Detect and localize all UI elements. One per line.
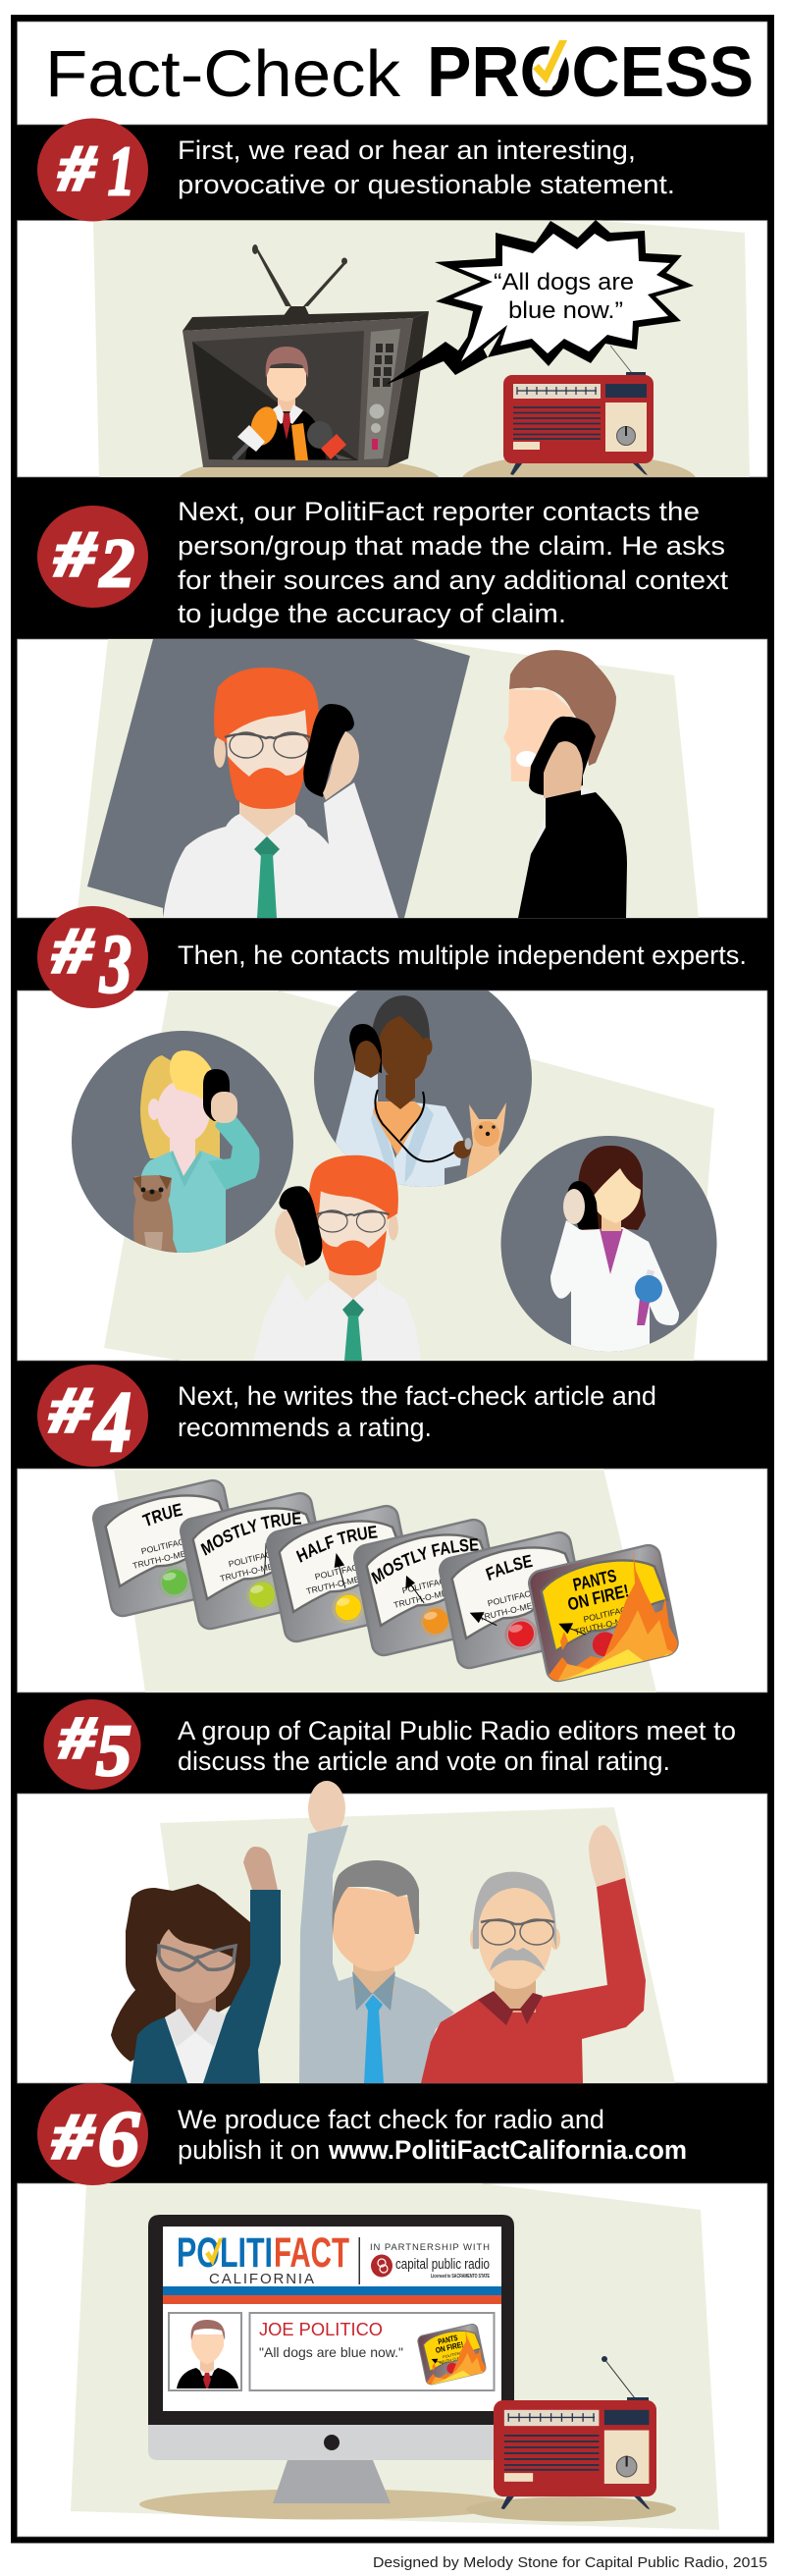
- reporter calling experts: [253, 1155, 421, 1361]
- meter: pants on fire: PANTS: [571, 1565, 618, 1595]
- step 2 badge: [37, 506, 148, 608]
- meter: true: POLITIFACT: [140, 1535, 191, 1556]
- icon: radio with antenna: [494, 2356, 656, 2509]
- profile card: [169, 2313, 241, 2390]
- step 1 badge: #: [58, 133, 97, 204]
- meter: false: POLITIFACT: [487, 1587, 538, 1608]
- expert: doctor with dog: [314, 991, 532, 1193]
- partnership logo: [370, 2242, 490, 2280]
- speech bubble: [386, 220, 694, 385]
- step 4 text: [178, 1381, 656, 1442]
- meter: false: FALSE: [485, 1555, 533, 1581]
- step 4 text: Next, he writes the fact-check article and: [178, 1381, 656, 1411]
- meter: true: TRUTH-O-METER: [131, 1544, 203, 1571]
- step 5 badge: 5: [96, 1711, 131, 1792]
- step 4 badge: 4: [92, 1375, 131, 1471]
- meter: pants on fire: POLITIFACT: [583, 1603, 633, 1625]
- step 6 badge: [37, 2083, 148, 2185]
- icon: desktop monitor with website: [148, 2215, 514, 2503]
- panel 4: truth-o-meter ratings: [17, 1469, 767, 1692]
- meter: mostly false: [353, 1518, 491, 1657]
- meter: mostly false: TRUTH-O-METER: [392, 1583, 464, 1610]
- claim card: JOE POLITICO: [259, 2319, 383, 2339]
- step 2 badge: 2: [99, 526, 134, 602]
- step 4 badge: [37, 1365, 148, 1471]
- step 4 text: recommends a rating.: [178, 1413, 432, 1442]
- step 2 badge: #: [54, 518, 97, 590]
- mini pants on fire meter: [417, 2323, 489, 2387]
- politifact logo: [177, 2229, 349, 2287]
- claim card: "All dogs are blue now.": [259, 2344, 403, 2360]
- panel 6: published online and on radio: [18, 2183, 767, 2537]
- bubble quote: [494, 269, 634, 324]
- step 2 text: [178, 497, 729, 628]
- reporter with phone: [163, 668, 398, 918]
- step 2 text: person/group that made the claim. He asks: [178, 531, 725, 561]
- politifact logo: POLITI: [177, 2229, 273, 2277]
- panel 2: reporter contacts source: [18, 639, 767, 918]
- meter: pants on fire: ON FIRE!: [566, 1581, 631, 1614]
- step 1 badge: 1: [108, 134, 134, 210]
- meter: true: [92, 1478, 230, 1618]
- partnership logo: capital public radio: [395, 2256, 490, 2273]
- step 5 text: A group of Capital Public Radio editors meet to: [178, 1716, 736, 1745]
- source on phone: [503, 650, 627, 918]
- meter: true: TRUE: [141, 1503, 183, 1526]
- pug: [132, 1175, 178, 1253]
- step 6 text: We produce fact check for radio and: [178, 2105, 604, 2134]
- meter: pants on fire: [527, 1543, 684, 1685]
- step 1 text: First, we read or hear an interesting,: [178, 135, 636, 165]
- expert: vet with pug: [72, 1031, 293, 1266]
- step 4 badge: #: [49, 1374, 92, 1446]
- meter: half true: POLITIFACT: [314, 1561, 365, 1582]
- partnership logo: Licensed to SACRAMENTO STATE: [431, 2274, 490, 2280]
- meter: mostly true: POLITIFACT: [228, 1548, 279, 1569]
- meter: mostly false: MOSTLY FALSE: [371, 1538, 479, 1584]
- step 2 text: Next, our PolitiFact reporter contacts the: [178, 497, 700, 526]
- politifact logo: FACT: [274, 2229, 349, 2277]
- bubble quote: blue now.”: [508, 297, 623, 324]
- step 5 text: [178, 1716, 736, 1776]
- title: PROCESS with check mark: PROCESS: [427, 33, 754, 112]
- panel 1: statement on tv and radio: [17, 220, 767, 477]
- title: Fact-Check: Fact-Check: [45, 37, 401, 111]
- claim card: [249, 2313, 495, 2390]
- meter: false: TRUTH-O-METER: [478, 1596, 550, 1623]
- meter: mostly true: TRUTH-O-METER: [219, 1557, 290, 1583]
- meter: false: [439, 1531, 576, 1669]
- editor: woman with cat-eye glasses: [111, 1847, 281, 2083]
- step 5 badge: #: [59, 1705, 97, 1770]
- step 2 text: to judge the accuracy of claim.: [178, 599, 566, 628]
- editor: man in red sweater: [421, 1825, 646, 2083]
- step 2 text: for their sources and any additional context: [178, 565, 729, 595]
- step 3 badge: #: [52, 915, 94, 987]
- step 6 text: publish it on: [178, 2135, 320, 2165]
- meter: pants on fire: TRUTH-O-METER: [574, 1611, 646, 1637]
- anchor figure: [234, 347, 353, 460]
- step 6 text: www.PolitiFactCalifornia.com: [328, 2135, 687, 2165]
- meter: mostly true: MOSTLY TRUE: [200, 1512, 302, 1556]
- step 1 text: [178, 135, 675, 199]
- meter: mostly true: [180, 1492, 316, 1630]
- meter: half true: [266, 1504, 403, 1643]
- icon: television with anchor: [183, 244, 429, 467]
- step 5 text: discuss the article and vote on final rating.: [178, 1746, 670, 1776]
- step 1 text: provocative or questionable statement.: [178, 170, 675, 199]
- title panel: [18, 22, 767, 125]
- panel 5: editors vote: [18, 1781, 767, 2083]
- step 3 badge: 3: [99, 918, 131, 1010]
- icon: radio: [503, 346, 654, 475]
- step 6 badge: 6: [98, 2094, 140, 2182]
- rug under radio: [466, 2497, 676, 2521]
- bubble quote: “All dogs are: [494, 269, 634, 295]
- meter: half true: HALF TRUE: [296, 1526, 378, 1563]
- panel 3: independent experts: [18, 991, 767, 1361]
- step 5 badge: [43, 1699, 141, 1792]
- meter: mostly false: POLITIFACT: [401, 1575, 452, 1595]
- step 6 text: [178, 2105, 687, 2165]
- step 1 badge: [37, 118, 148, 222]
- step 6 badge: #: [52, 2101, 95, 2173]
- step 3 badge: [37, 906, 148, 1010]
- partnership logo: IN PARTNERSHIP WITH: [370, 2242, 490, 2253]
- step 3 text: Then, he contacts multiple independent experts.: [178, 940, 747, 970]
- politifact logo: CALIFORNIA: [209, 2271, 314, 2287]
- editor: man in blue shirt: [299, 1781, 454, 2083]
- dog: [466, 1102, 506, 1178]
- meter: half true: TRUTH-O-METER: [305, 1570, 377, 1596]
- expert: scientist: [500, 1136, 716, 1360]
- credit line: Designed by Melody Stone for Capital Public Radio, 2015: [373, 2554, 767, 2571]
